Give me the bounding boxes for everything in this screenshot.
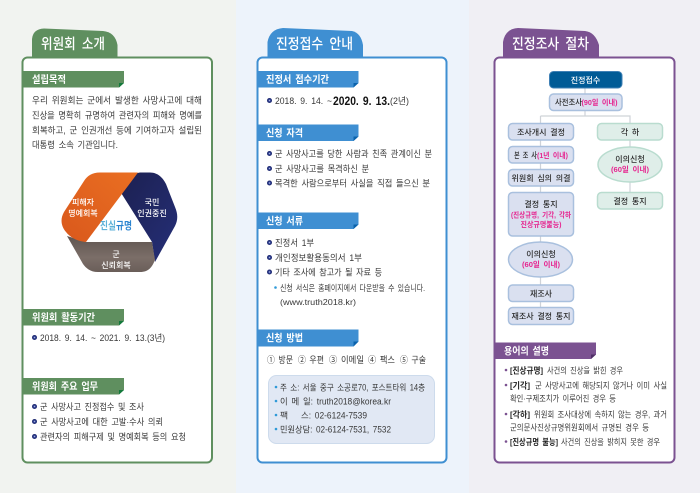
panel frame: [494, 58, 674, 462]
panel frame: [22, 58, 212, 462]
heading: documents: 신청 서류: [266, 214, 303, 228]
text block: application period: [267, 94, 409, 108]
text block: application period: 2018. 9. 14. ~: [275, 96, 332, 106]
flow step: decision notice right: [598, 192, 662, 209]
panel: committee introduction: [22, 28, 212, 462]
text block: glossary: [진상규명]: [510, 366, 543, 376]
diagram: truth-finding triangle: 신뢰회복: [101, 260, 131, 270]
list: application methods: ⑤ 구술: [400, 355, 426, 365]
title tab: investigation procedure: 진정조사 절차: [512, 36, 589, 53]
text block: purpose: [32, 96, 202, 150]
flow step: committee resolution: [508, 170, 574, 186]
flow step: dismissal: 각 하: [621, 127, 640, 137]
list: documents: 기타 조사에 참고가 될 자료 등: [275, 268, 382, 278]
text block: glossary: 군 사망사고에 해당되지 않거나 이미 사실: [535, 380, 667, 390]
text block: application period: (2년): [390, 96, 409, 106]
flow step: petition received: 진정접수: [571, 75, 600, 85]
list: documents: (www.truth2018.kr): [280, 297, 356, 307]
diagram: truth-finding triangle: 피해자: [72, 198, 95, 207]
text block: glossary: 군의문사진상규명위원회에서 규명된 경우 등: [510, 422, 649, 432]
text block: purpose: 진상을 명확히 규명하여 관련자의 피해와 명예를: [32, 110, 202, 120]
flow step: dismissal: [598, 124, 662, 140]
flow step: main investigation: (1년 이내): [537, 150, 568, 160]
heading: main duties: [22, 378, 124, 394]
panel frame: [258, 58, 446, 462]
title tab: committee introduction: 위원회 소개: [41, 36, 105, 53]
flow step: objection ellipse left: (60일 이내): [522, 259, 561, 269]
list: main duties: [32, 401, 186, 442]
list: application methods: ③ 이메일: [329, 355, 364, 365]
text block: purpose: 회복하고, 군 인권개선 등에 기여하고자 설립된: [32, 124, 202, 136]
flow step: objection ellipse right: [598, 147, 662, 182]
heading: application period: [257, 71, 358, 88]
flow step: decision notice: [508, 192, 574, 236]
list: application methods: [267, 354, 426, 365]
heading: documents: [257, 212, 358, 229]
text block: glossary: 사건의 진상을 밝히지 못한 경우: [561, 437, 660, 447]
heading: purpose: [22, 71, 124, 88]
heading: glossary: [494, 342, 596, 359]
list: application methods: ① 방문: [267, 355, 293, 365]
flow step: objection ellipse left: 이의신청: [526, 249, 556, 259]
list: eligibility: 군 사망사고를 당한 사람과 친족 관계이신 분: [275, 148, 432, 159]
title tab: petition guide: 진정접수 안내: [276, 36, 353, 53]
title tab: committee introduction: [32, 28, 118, 57]
heading: activity period: 위원회 활동기간: [32, 311, 95, 324]
heading: application period: 진정서 접수기간: [266, 73, 329, 86]
title tab: investigation procedure: [503, 28, 599, 57]
diagram: truth-finding triangle: 인권중진: [137, 208, 167, 218]
list: application methods: ② 우편: [298, 354, 324, 365]
text block: glossary: 확인·구제조치가 이루어진 경우 등: [510, 394, 616, 404]
text block: glossary: 사건의 진상을 밝힌 경우: [547, 366, 623, 376]
contact box: [268, 376, 434, 444]
flow step: decision notice: 결정 통지: [524, 199, 558, 209]
list: main duties: 관련자의 피해구제 및 명예회복 등의 요청: [40, 431, 186, 442]
flow step: preliminary investigation: (90일 이내): [582, 97, 618, 107]
text block: glossary: [505, 366, 667, 447]
flow step: reinvestigation notice: 재조사 결정 통지: [512, 311, 570, 321]
diagram: truth-finding triangle: 진실: [100, 219, 116, 232]
heading: activity period: [22, 309, 124, 326]
flow step: reinvestigation: 재조사: [530, 288, 553, 298]
heading: eligibility: [257, 124, 358, 141]
diagram: truth-finding triangle: 명예회복: [68, 208, 98, 218]
flow step: objection ellipse right: 이의신청: [615, 154, 645, 164]
text block: glossary: [진상규명 불능]: [510, 437, 558, 447]
heading: eligibility: 신청 자격: [266, 126, 303, 140]
contact box: 스: 02-6124-7539: [301, 410, 367, 420]
flowchart connectors: [540, 88, 630, 307]
flow step: start of investigation: [508, 124, 574, 140]
panel: investigation procedure: [494, 28, 674, 462]
list: documents: 진정서 1부: [275, 238, 314, 248]
text block: purpose: 대통령 소속 기관입니다.: [32, 139, 118, 150]
diagram: truth-finding triangle: 국민: [145, 197, 159, 207]
list: documents: 신청 서식은 홈페이지에서 다운받을 수 있습니다.: [280, 283, 425, 293]
flow step: decision notice: 진상규명불능): [520, 219, 562, 229]
text block: glossary: 위원회 조사대상에 속하지 않는 경우, 과거: [534, 410, 667, 420]
flow step: decision notice right: 결정 통지: [613, 196, 647, 206]
flow step: main investigation: [508, 146, 574, 163]
text block: glossary: [기각]: [510, 380, 530, 390]
list: documents: [267, 238, 425, 307]
heading: purpose: 설립목적: [32, 73, 66, 86]
diagram: truth-finding triangle: [62, 172, 177, 272]
contact box: 민원상담: 02-6124-7531, 7532: [280, 424, 391, 434]
text block: purpose: 우리 위원회는 군에서 발생한 사망사고에 대해: [32, 96, 202, 106]
diagram: truth-finding triangle: 규명: [116, 220, 132, 232]
contact box: 이 메 일: truth2018@korea.kr: [280, 396, 391, 406]
heading: methods: [257, 330, 358, 346]
text block: glossary: [각하]: [510, 410, 530, 420]
title tab: petition guide: [268, 28, 363, 57]
list: main duties: 군 사망사고 진정접수 및 조사: [40, 401, 145, 412]
list: eligibility: [267, 148, 432, 188]
flow step: main investigation: 본 조 사: [514, 150, 537, 160]
list: main duties: 군 사망사고에 대한 고발·수사 의뢰: [40, 417, 163, 427]
heading: methods: 신청 방법: [266, 332, 303, 344]
heading: glossary: 용어의 설명: [504, 346, 549, 358]
contact box: 팩: [280, 410, 288, 420]
list: documents: 개인정보활용동의서 1부: [275, 252, 362, 263]
contact box: 주 소: 서울 중구 소공로70, 포스트타워 14층: [280, 382, 425, 392]
text block: activity period: 2018. 9. 14. ~ 2021. 9. 13.(3년): [40, 333, 165, 343]
diagram: truth-finding triangle: 군: [112, 250, 120, 259]
flow step: petition received: [550, 72, 622, 88]
flow step: preliminary investigation: 사전조사: [555, 97, 583, 107]
flow step: objection ellipse left: [508, 242, 572, 277]
heading: main duties: 위원회 주요 업무: [32, 380, 98, 393]
list: eligibility: 군 사망사고를 목격하신 분: [275, 163, 369, 174]
flow step: preliminary investigation: [550, 94, 622, 110]
flow step: reinvestigation: [508, 285, 574, 302]
flow step: reinvestigation notice: [508, 308, 574, 324]
text block: application period: 2020. 9. 13.: [333, 94, 390, 108]
list: application methods: ④ 팩스: [368, 355, 395, 365]
list: eligibility: 목격한 사람으로부터 사실을 직접 들으신 분: [275, 178, 430, 188]
panel: petition guide: [257, 28, 446, 462]
flow step: committee resolution: 위원회 심의 의결: [512, 173, 570, 183]
flow step: start of investigation: 조사개시 결정: [517, 127, 565, 137]
flow step: decision notice: (진상규명, 기각, 각하: [511, 210, 571, 220]
flow step: objection ellipse right: (60일 이내): [611, 164, 650, 174]
